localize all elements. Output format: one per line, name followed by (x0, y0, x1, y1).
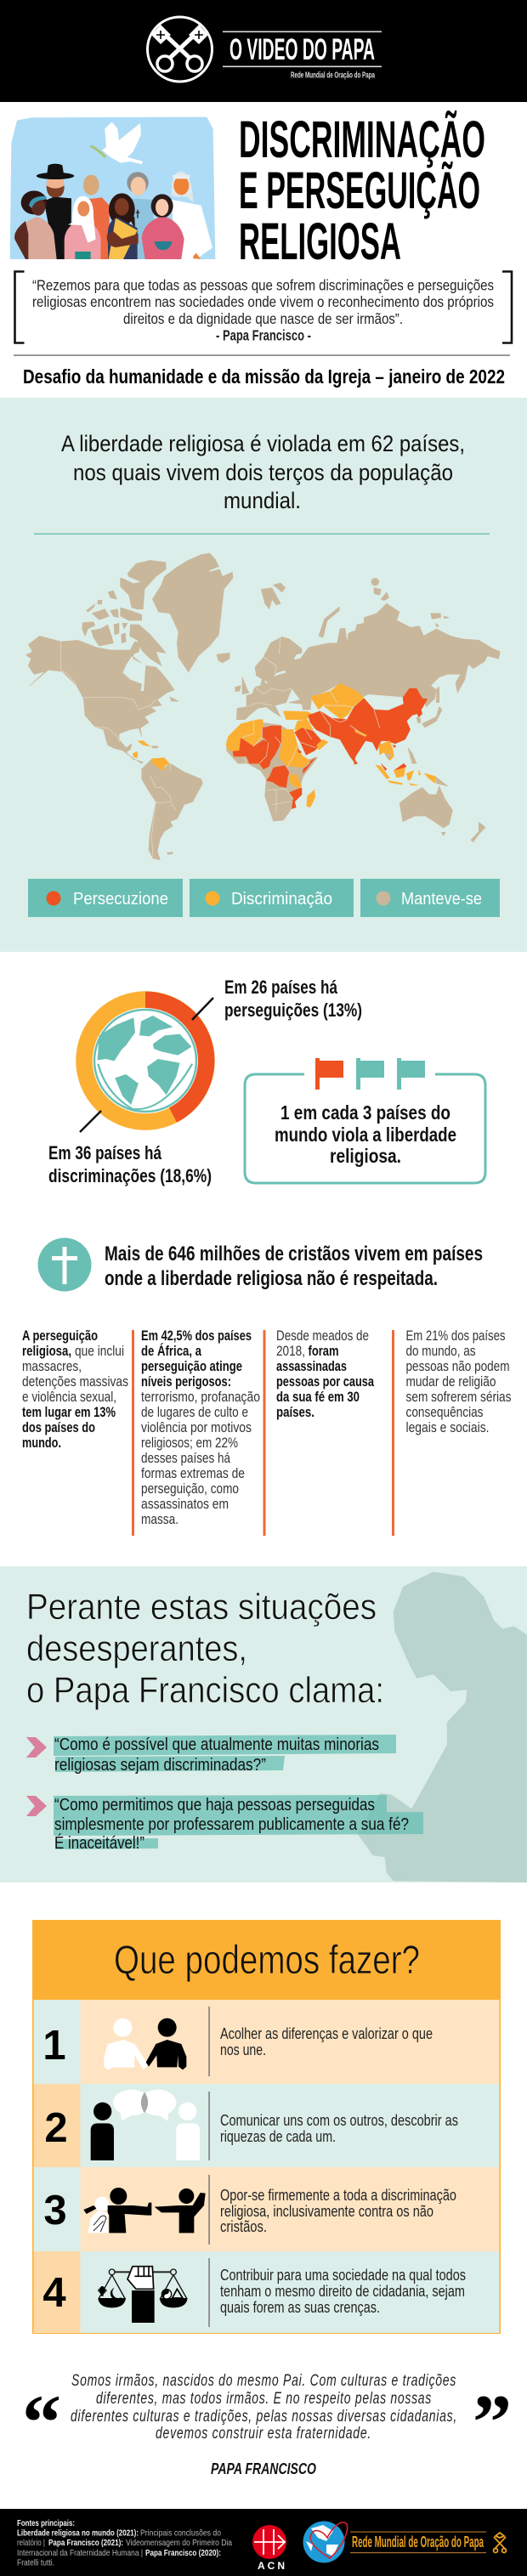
map heading (61, 431, 465, 513)
fact column 2: de África, a (141, 1343, 202, 1359)
fact column 2: formas extremas de (141, 1466, 245, 1481)
logo: ACN: ACN (258, 2560, 287, 2572)
fact column 3: pessoas por causa (276, 1374, 375, 1390)
fact column 1: religiosa, (22, 1344, 71, 1359)
callout: one in three countries: 1 em cada 3 países do (280, 1101, 450, 1124)
quote 1 with highlight: “Como é possível que atualmente muitas minorias (54, 1735, 379, 1754)
pope silhouette (358, 1571, 527, 1882)
sources (17, 2518, 232, 2568)
icon: person protecting another from aggressor (83, 2188, 206, 2233)
fact column 1: que inclui (75, 1344, 124, 1359)
fact column 2: de lugares de culto e (141, 1405, 248, 1420)
fact column 1: detenções massivas (22, 1374, 128, 1390)
appeal heading: Perante estas situações (26, 1587, 377, 1628)
appeal heading: o Papa Francisco clama: (26, 1670, 384, 1711)
prayer quote with brackets (15, 272, 512, 343)
row 4 text: quais forem as suas crenças. (220, 2299, 380, 2316)
footer (0, 2509, 527, 2576)
logo: globe with heart (303, 2521, 348, 2563)
fact column 3: foram (308, 1344, 338, 1359)
fact column 2 (141, 1328, 260, 1527)
legend: persecution (28, 879, 183, 917)
legend: persecution: Persecuzione (73, 890, 168, 909)
icon: three flags (315, 1058, 425, 1090)
panel heading: Que podemos fazer? (114, 1937, 420, 1982)
prayer quote with brackets: direitos e da dignidade que nasce de ser irmãos”. (123, 310, 403, 327)
icon: globe continents (98, 1016, 192, 1109)
panel: world map section (0, 398, 527, 952)
map heading: mundial. (224, 488, 301, 513)
quote 2 with highlight (26, 1795, 423, 1853)
icon: small keys emblem (493, 2533, 507, 2553)
icon: hand holding scales (98, 2267, 188, 2323)
quote 2 with highlight: simplesmente por professarem publicamente a sua fé? (54, 1815, 409, 1834)
leader line: persecution (192, 998, 213, 1020)
world map (26, 553, 500, 860)
fact column 2: terrorismo, profanação (141, 1390, 260, 1405)
logo wordmark: O VIDEO DO PAPA (230, 33, 375, 66)
sources: Papa Francisco (2021): (48, 2538, 123, 2548)
row 3 (34, 2167, 500, 2251)
row 2 text: riquezas de cada um. (220, 2128, 336, 2145)
number 2: 2 (44, 2105, 68, 2151)
number 3: 3 (43, 2188, 67, 2233)
logo wordmark: Rede Mundial de Oração do Papa (291, 71, 375, 80)
legend: unchanged (360, 879, 500, 917)
prayer quote with brackets: - Papa Francisco - (216, 326, 311, 343)
row 1 text (220, 2025, 433, 2058)
icon: opening quote mark: “ (22, 2379, 61, 2466)
number 4: 4 (42, 2270, 66, 2316)
fact column 4: mudar de religião (406, 1374, 496, 1390)
row 3 text: cristãos. (220, 2218, 267, 2235)
fact column 4: legais e sociais. (406, 1420, 490, 1435)
label: discrimination share: discriminações (18,6%) (48, 1165, 212, 1186)
label: discrimination share (48, 1142, 212, 1186)
logo wordmark (223, 31, 382, 80)
christians statement (105, 1243, 483, 1290)
number 1: 1 (42, 2023, 66, 2069)
legend: discrimination (190, 879, 354, 917)
closing quote: devemos construir esta fraternidade. (156, 2424, 371, 2443)
label: persecution share: Em 26 países há (224, 977, 338, 998)
row 1 (34, 2000, 500, 2084)
appeal heading: desesperantes, (26, 1628, 247, 1669)
quote 2 with highlight: É inaceitável!” (54, 1833, 144, 1853)
leader line: discrimination (80, 1111, 101, 1132)
sources: Fratelli tutti. (17, 2558, 54, 2568)
fact column 2: assassinatos em (141, 1497, 229, 1512)
row 4 text (220, 2267, 466, 2316)
legend: discrimination: Discriminação (231, 890, 332, 909)
row 4 text: tenham o mesmo direito de cidadania, sejam (220, 2283, 465, 2300)
icon: crossed keys logo (148, 17, 212, 82)
christians statement: onde a liberdade religiosa não é respeitada. (105, 1267, 438, 1290)
callout: one in three countries: mundo viola a liberdade (275, 1124, 456, 1146)
logo: ACN (252, 2525, 287, 2572)
eurasia, africa and oceania (226, 578, 500, 842)
row 3 text: religiosa, inclusivamente contra os não (220, 2203, 434, 2220)
header band (0, 0, 527, 102)
panel: what can we do (32, 1920, 501, 2334)
fact column 1: A perseguição (22, 1328, 98, 1344)
title: RELIGIOSA (239, 212, 401, 270)
icon: two people talking (91, 2090, 200, 2160)
fact column 3: países. (276, 1405, 314, 1420)
callout: one in three countries: religiosa. (330, 1145, 401, 1167)
sources: Papa Francisco (2020): (145, 2548, 221, 2558)
sources: Videomensagem do Primeiro Dia (126, 2538, 232, 2548)
map heading: A liberdade religiosa é violada em 62 países, (61, 431, 465, 456)
fact column 3: 2018, (276, 1344, 305, 1359)
sources: Principais conclusões do (140, 2528, 221, 2538)
sources: Liberdade religiosa no mundo (2021): (17, 2528, 139, 2538)
quote 1 with highlight (26, 1735, 396, 1775)
fact column 4: consequências (406, 1405, 483, 1420)
icon: cross in circle (37, 1237, 92, 1292)
fact column 3: da sua fé em 30 (276, 1390, 360, 1405)
row 2 text: Comunicar uns com os outros, descobrir as (220, 2112, 458, 2129)
panel: pope's appeal (0, 1566, 527, 1882)
americas and arctic (26, 553, 233, 860)
fact column 3 (276, 1328, 375, 1420)
quote author: PAPA FRANCISCO (211, 2460, 316, 2477)
fact column 4 (406, 1328, 512, 1435)
fact column 2: massa. (141, 1512, 178, 1527)
fact column 2: violência por motivos (141, 1420, 252, 1435)
fact column 1: e violência sexual, (22, 1390, 116, 1405)
sources: Fontes principais: (17, 2518, 75, 2528)
row 1 text: nos une. (220, 2041, 266, 2058)
fact column 1 (22, 1328, 128, 1451)
row 2 text (220, 2112, 458, 2145)
fact column 2: níveis perigosos: (141, 1374, 231, 1390)
donut chart with globe (84, 991, 214, 1123)
fact column 2: perseguição, como (141, 1481, 239, 1497)
legend (28, 879, 500, 917)
appeal heading (26, 1587, 384, 1711)
row 4 (34, 2251, 500, 2333)
icon: two people embracing (104, 2018, 186, 2069)
legend: unchanged: Manteve-se (401, 890, 482, 909)
illustration: people of different faiths and dove (10, 117, 215, 259)
fact column 4: do mundo, as (406, 1344, 476, 1359)
callout: one in three countries (245, 1058, 485, 1183)
fact column 3: Desde meados de (276, 1328, 369, 1344)
fact column 1: massacres, (22, 1359, 82, 1374)
label: discrimination share: Em 36 países há (48, 1142, 162, 1163)
label: persecution share: perseguições (13%) (224, 999, 362, 1021)
fact column 1: dos países do (22, 1420, 95, 1435)
fact column 2: Em 42,5% dos países (141, 1328, 252, 1344)
title (239, 110, 485, 270)
quote 1 with highlight: religiosas sejam discriminadas?” (54, 1755, 266, 1775)
sources: relatório | (17, 2538, 45, 2548)
fact column 2: perseguição atinge (141, 1359, 242, 1374)
label: persecution share (224, 977, 362, 1021)
fact column 4: Em 21% dos países (406, 1328, 505, 1344)
sources: Internacional da Fraternidade Humana | (17, 2548, 143, 2558)
row 3 text (220, 2187, 456, 2235)
fact column 1: mundo. (22, 1435, 61, 1451)
fact column 3: assassinadas (276, 1359, 347, 1374)
row 1 text: Acolher as diferenças e valorizar o que (220, 2025, 433, 2042)
row 4 text: Contribuir para uma sociedade na qual todos (220, 2267, 466, 2284)
row 2 (34, 2084, 500, 2167)
map heading: nos quais vivem dois terços da população (73, 460, 453, 485)
icon: closing quote mark: ” (473, 2379, 512, 2466)
quote 2 with highlight: “Como permitimos que haja pessoas perseguidas (54, 1795, 375, 1815)
fact column 1: tem lugar em 13% (22, 1405, 116, 1420)
closing quote (22, 2371, 512, 2477)
fact column 2: religiosos; em 22% (141, 1435, 238, 1451)
fact column 2: desses países há (141, 1451, 231, 1466)
row 3 text: Opor-se firmemente a toda a discriminação (220, 2187, 456, 2204)
